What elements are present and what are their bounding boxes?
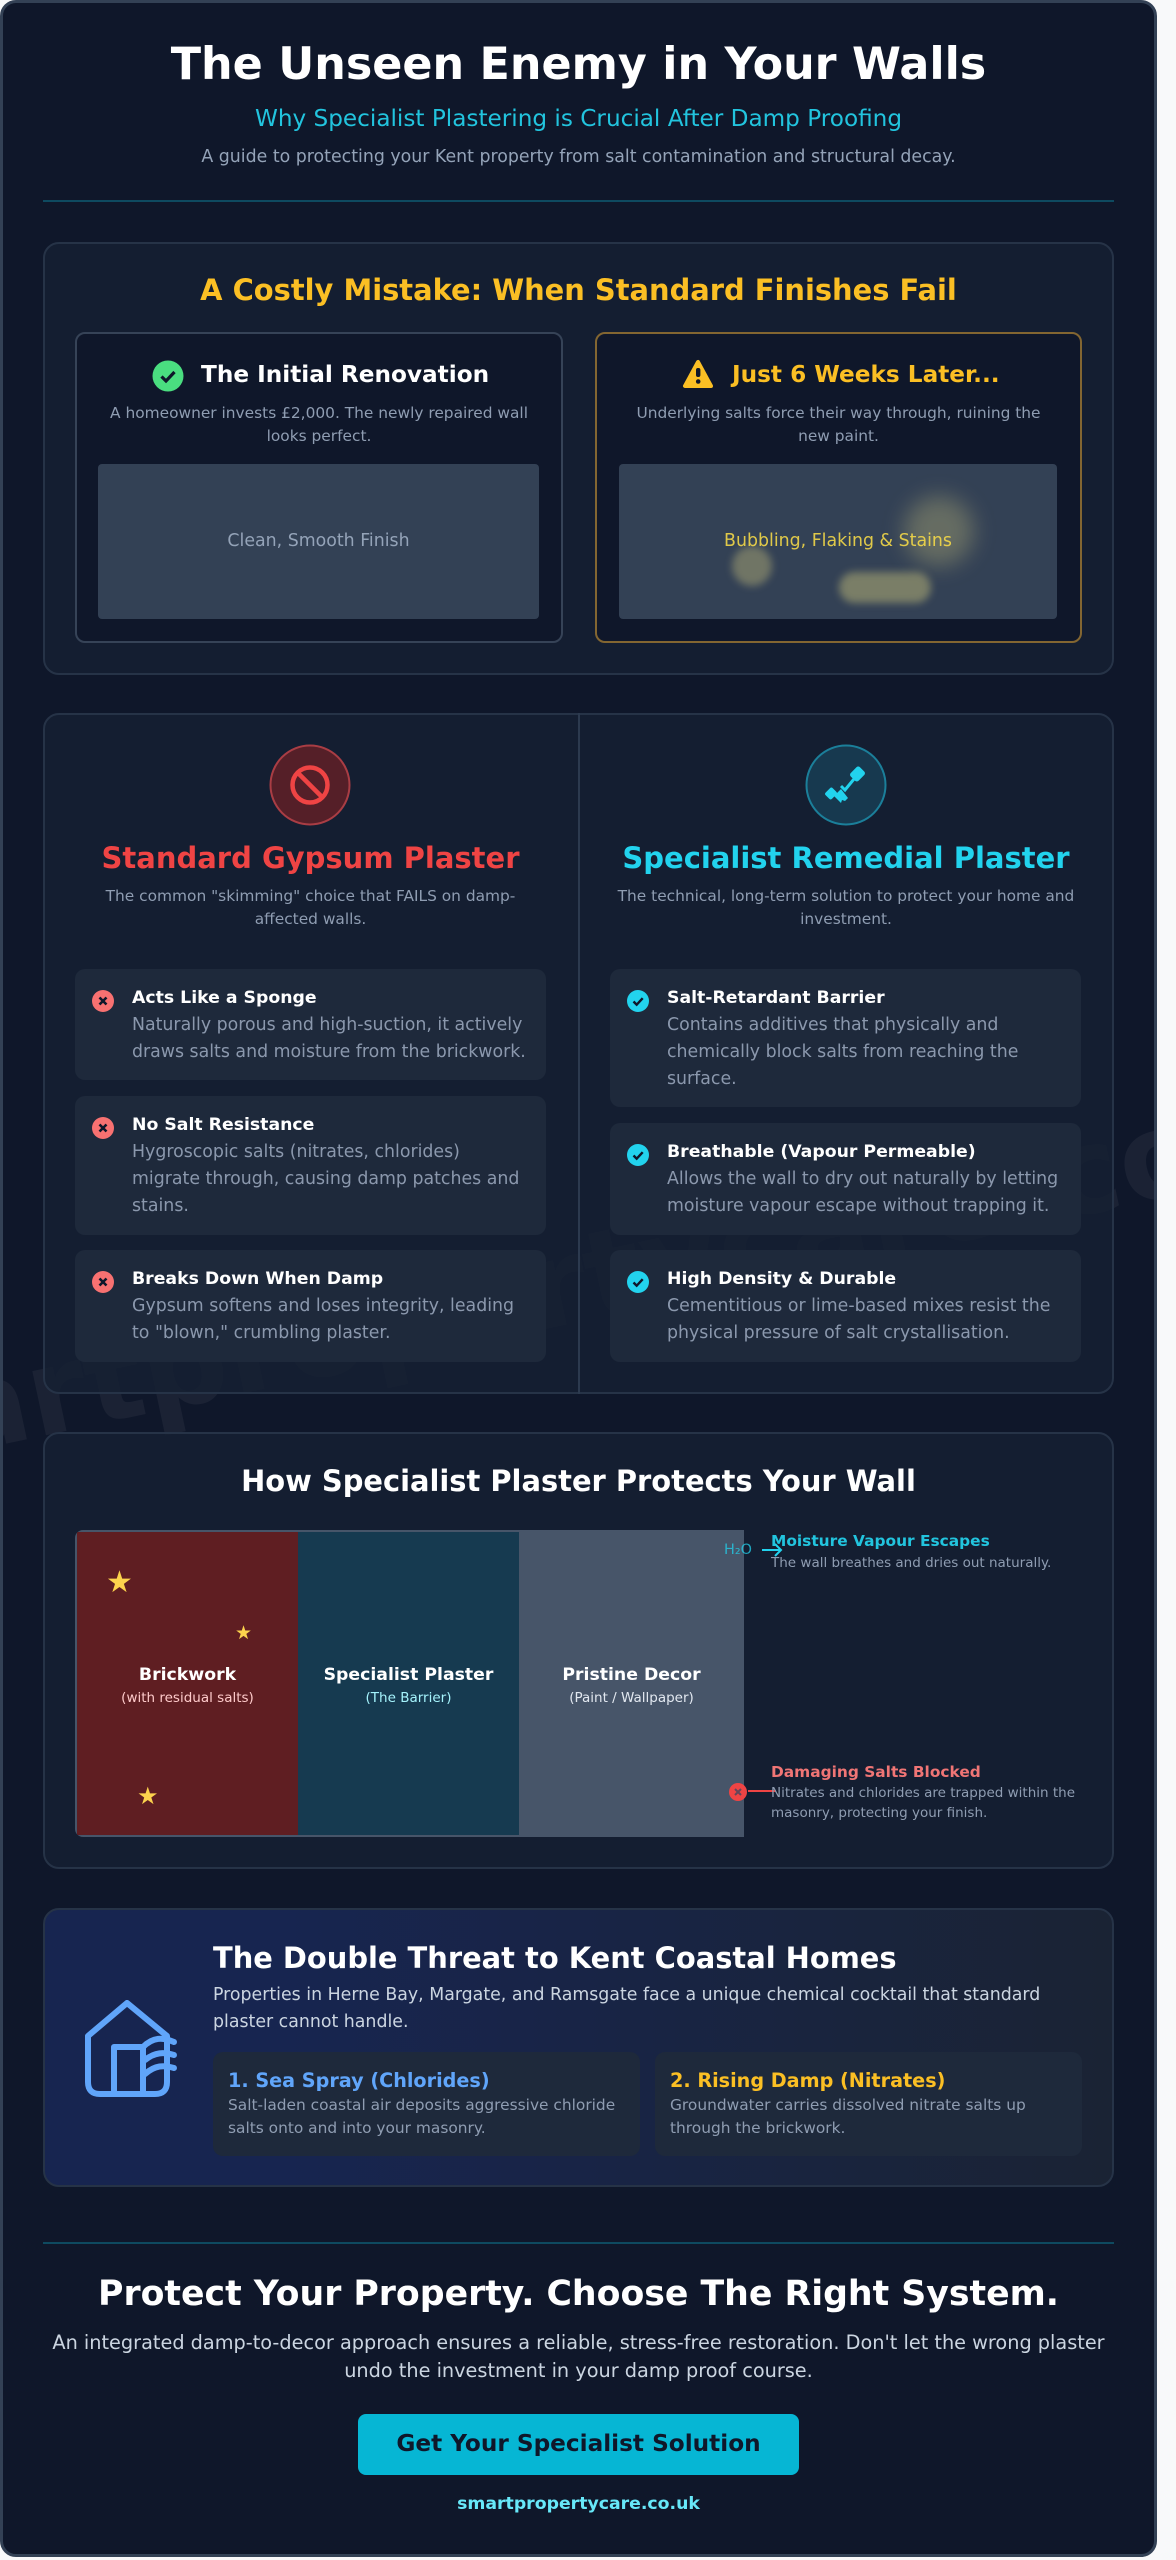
callout title: Damaging Salts Blocked bbox=[771, 1763, 981, 1781]
threat text bbox=[228, 2096, 615, 2137]
threat text: Groundwater carries dissolved nitrate salts up bbox=[670, 2096, 1026, 2114]
item text bbox=[132, 1296, 514, 1343]
card: six weeks later bbox=[595, 332, 1082, 643]
card text: A homeowner invests £2,000. The newly repaired wall bbox=[110, 404, 528, 422]
blocked salt icon bbox=[729, 1783, 747, 1801]
threat card: chlorides bbox=[213, 2052, 640, 2156]
threat text: Salt-laden coastal air deposits aggressive chloride bbox=[228, 2096, 615, 2114]
title: The Unseen Enemy in Your Walls bbox=[171, 39, 986, 90]
item text: surface. bbox=[667, 1069, 737, 1089]
icon: check bbox=[627, 1144, 649, 1166]
threat card: nitrates bbox=[655, 2052, 1082, 2156]
closing text bbox=[52, 2331, 1105, 2382]
item text: to "blown," crumbling plaster. bbox=[132, 1323, 390, 1343]
callout text: Nitrates and chlorides are trapped within the bbox=[771, 1785, 1075, 1801]
intro text: Properties in Herne Bay, Margate, and Ramsgate face a unique chemical cocktail that standard bbox=[213, 1985, 1040, 2005]
heading: double threat: The Double Threat to Kent Coastal Homes bbox=[213, 1941, 897, 1975]
item text: Contains additives that physically and bbox=[667, 1015, 998, 1035]
button: Get Your Specialist Solution bbox=[396, 2430, 761, 2457]
item title: Breathable (Vapour Permeable) bbox=[667, 1142, 976, 1162]
card text bbox=[636, 404, 1041, 445]
list item bbox=[75, 1250, 546, 1362]
vapour label: H₂O bbox=[724, 1542, 752, 1558]
callout: salts bbox=[771, 1763, 1075, 1820]
panel: how it protects bbox=[43, 1432, 1114, 1869]
card text: looks perfect. bbox=[267, 427, 371, 445]
icon: x bbox=[92, 990, 114, 1012]
brickwork label: Brickwork bbox=[139, 1665, 236, 1685]
panel: coastal threat bbox=[43, 1908, 1114, 2187]
decor sublabel: (Paint / Wallpaper) bbox=[569, 1690, 694, 1706]
item title: High Density & Durable bbox=[667, 1269, 896, 1289]
plaster sublabel: (The Barrier) bbox=[366, 1690, 451, 1706]
card text: new paint. bbox=[798, 427, 879, 445]
salt crystal: ★ bbox=[137, 1782, 159, 1810]
item text: Allows the wall to dry out naturally by letting bbox=[667, 1169, 1058, 1189]
panel: costly mistake bbox=[43, 242, 1114, 675]
item text: migrate through, causing damp patches and bbox=[132, 1169, 519, 1189]
layer: plaster bbox=[298, 1532, 519, 1835]
intro text: A guide to protecting your Kent property from salt contamination and structural decay. bbox=[201, 147, 956, 167]
text: standard plaster bbox=[106, 887, 515, 928]
icon: ban bbox=[270, 744, 350, 826]
item text: chemically block salts from reaching the bbox=[667, 1042, 1018, 1062]
subtitle: Why Specialist Plastering is Crucial After Damp Proofing bbox=[255, 106, 902, 132]
card heading: Just 6 Weeks Later... bbox=[732, 361, 1000, 388]
threat title: 2. Rising Damp (Nitrates) bbox=[670, 2069, 945, 2092]
item text: Cementitious or lime-based mixes resist the bbox=[667, 1296, 1050, 1316]
card text bbox=[110, 404, 528, 445]
threat text: salts onto and into your masonry. bbox=[228, 2119, 486, 2137]
icon: house with waves bbox=[85, 2000, 177, 2097]
button bbox=[358, 2414, 799, 2475]
salt crystal: ★ bbox=[235, 1622, 252, 1644]
damaged wall label: Bubbling, Flaking & Stains bbox=[724, 531, 952, 551]
icon: trowel bbox=[806, 744, 886, 826]
damaged wall illustration bbox=[619, 464, 1057, 619]
icon: check bbox=[627, 990, 649, 1012]
brickwork sublabel: (with residual salts) bbox=[121, 1690, 254, 1706]
heading: specialist plaster: Specialist Remedial Plaster bbox=[622, 841, 1070, 875]
intro text: plaster cannot handle. bbox=[213, 2012, 408, 2032]
item title: Acts Like a Sponge bbox=[132, 988, 317, 1008]
callout text: masonry, protecting your finish. bbox=[771, 1804, 987, 1820]
item text: moisture vapour escape without trapping it. bbox=[667, 1196, 1049, 1216]
icon: check bbox=[627, 1271, 649, 1293]
item title: Salt-Retardant Barrier bbox=[667, 988, 885, 1008]
icon: check circle bbox=[152, 360, 184, 392]
threat title: 1. Sea Spray (Chlorides) bbox=[228, 2069, 490, 2092]
stain blob wide bbox=[839, 572, 931, 603]
list item bbox=[75, 1096, 546, 1235]
item text bbox=[667, 1015, 1018, 1089]
block line bbox=[748, 1790, 776, 1792]
heading: how it protects: How Specialist Plaster Protects Your Wall bbox=[241, 1464, 916, 1498]
clean wall label: Clean, Smooth Finish bbox=[227, 531, 410, 551]
closing text: undo the investment in your damp proof course. bbox=[344, 2358, 813, 2382]
icon: warning triangle bbox=[682, 360, 713, 388]
callout text bbox=[771, 1785, 1075, 1820]
closing heading: Protect Your Property. Choose The Right System. bbox=[98, 2274, 1059, 2314]
item text bbox=[667, 1169, 1058, 1216]
item title: No Salt Resistance bbox=[132, 1115, 314, 1135]
plaster label: Specialist Plaster bbox=[324, 1665, 493, 1685]
text: specialist plaster bbox=[618, 887, 1074, 928]
icon: x bbox=[92, 1271, 114, 1293]
layer: brickwork bbox=[77, 1532, 298, 1835]
wall cross-section diagram bbox=[75, 1530, 744, 1837]
card heading: The Initial Renovation bbox=[201, 361, 489, 388]
item text bbox=[132, 1142, 519, 1216]
item text bbox=[132, 1015, 526, 1062]
item text: physical pressure of salt crystallisation. bbox=[667, 1323, 1010, 1343]
item text: Naturally porous and high-suction, it actively bbox=[132, 1015, 522, 1035]
item text: Gypsum softens and loses integrity, leading bbox=[132, 1296, 514, 1316]
list item bbox=[610, 969, 1081, 1107]
layer: decor bbox=[519, 1532, 744, 1835]
callout: vapour bbox=[770, 1532, 1051, 1571]
text: specialist plaster: The technical, long-term solution to protect your home and bbox=[618, 887, 1074, 905]
closing text: An integrated damp-to-decor approach ensures a reliable, stress-free restoration. Don't let the wrong plaster bbox=[52, 2331, 1105, 2354]
threat text bbox=[670, 2096, 1026, 2137]
text: specialist plaster: investment. bbox=[800, 910, 892, 928]
threat text: through the brickwork. bbox=[670, 2119, 845, 2137]
card: initial renovation bbox=[75, 332, 563, 643]
stain blob small bbox=[732, 546, 772, 586]
card text: Underlying salts force their way through, ruining the bbox=[636, 404, 1041, 422]
text: standard plaster: The common "skimming" choice that FAILS on damp- bbox=[106, 887, 515, 905]
salt crystal: ★ bbox=[106, 1565, 133, 1600]
icon: x bbox=[92, 1117, 114, 1139]
item text bbox=[667, 1296, 1050, 1343]
list item bbox=[75, 969, 546, 1080]
list item bbox=[610, 1250, 1081, 1362]
callout text: The wall breathes and dries out naturally. bbox=[771, 1555, 1051, 1571]
heading: costly mistake: A Costly Mistake: When Standard Finishes Fail bbox=[200, 273, 957, 307]
list item bbox=[610, 1123, 1081, 1235]
item title: Breaks Down When Damp bbox=[132, 1269, 383, 1289]
panel: comparison bbox=[43, 713, 1114, 1394]
stain blob large bbox=[904, 496, 974, 566]
clean wall illustration bbox=[98, 464, 539, 619]
item text: Hygroscopic salts (nitrates, chlorides) bbox=[132, 1142, 460, 1162]
heading: standard plaster: Standard Gypsum Plaster bbox=[102, 841, 520, 875]
website link: smartpropertycare.co.uk bbox=[457, 2494, 700, 2514]
item text: draws salts and moisture from the brickwork. bbox=[132, 1042, 526, 1062]
item text: stains. bbox=[132, 1196, 189, 1216]
intro text bbox=[213, 1985, 1040, 2032]
callout title: Moisture Vapour Escapes bbox=[771, 1532, 990, 1550]
vapour arrow bbox=[762, 1543, 782, 1557]
text: standard plaster: affected walls. bbox=[255, 910, 366, 928]
decor label: Pristine Decor bbox=[562, 1665, 701, 1685]
